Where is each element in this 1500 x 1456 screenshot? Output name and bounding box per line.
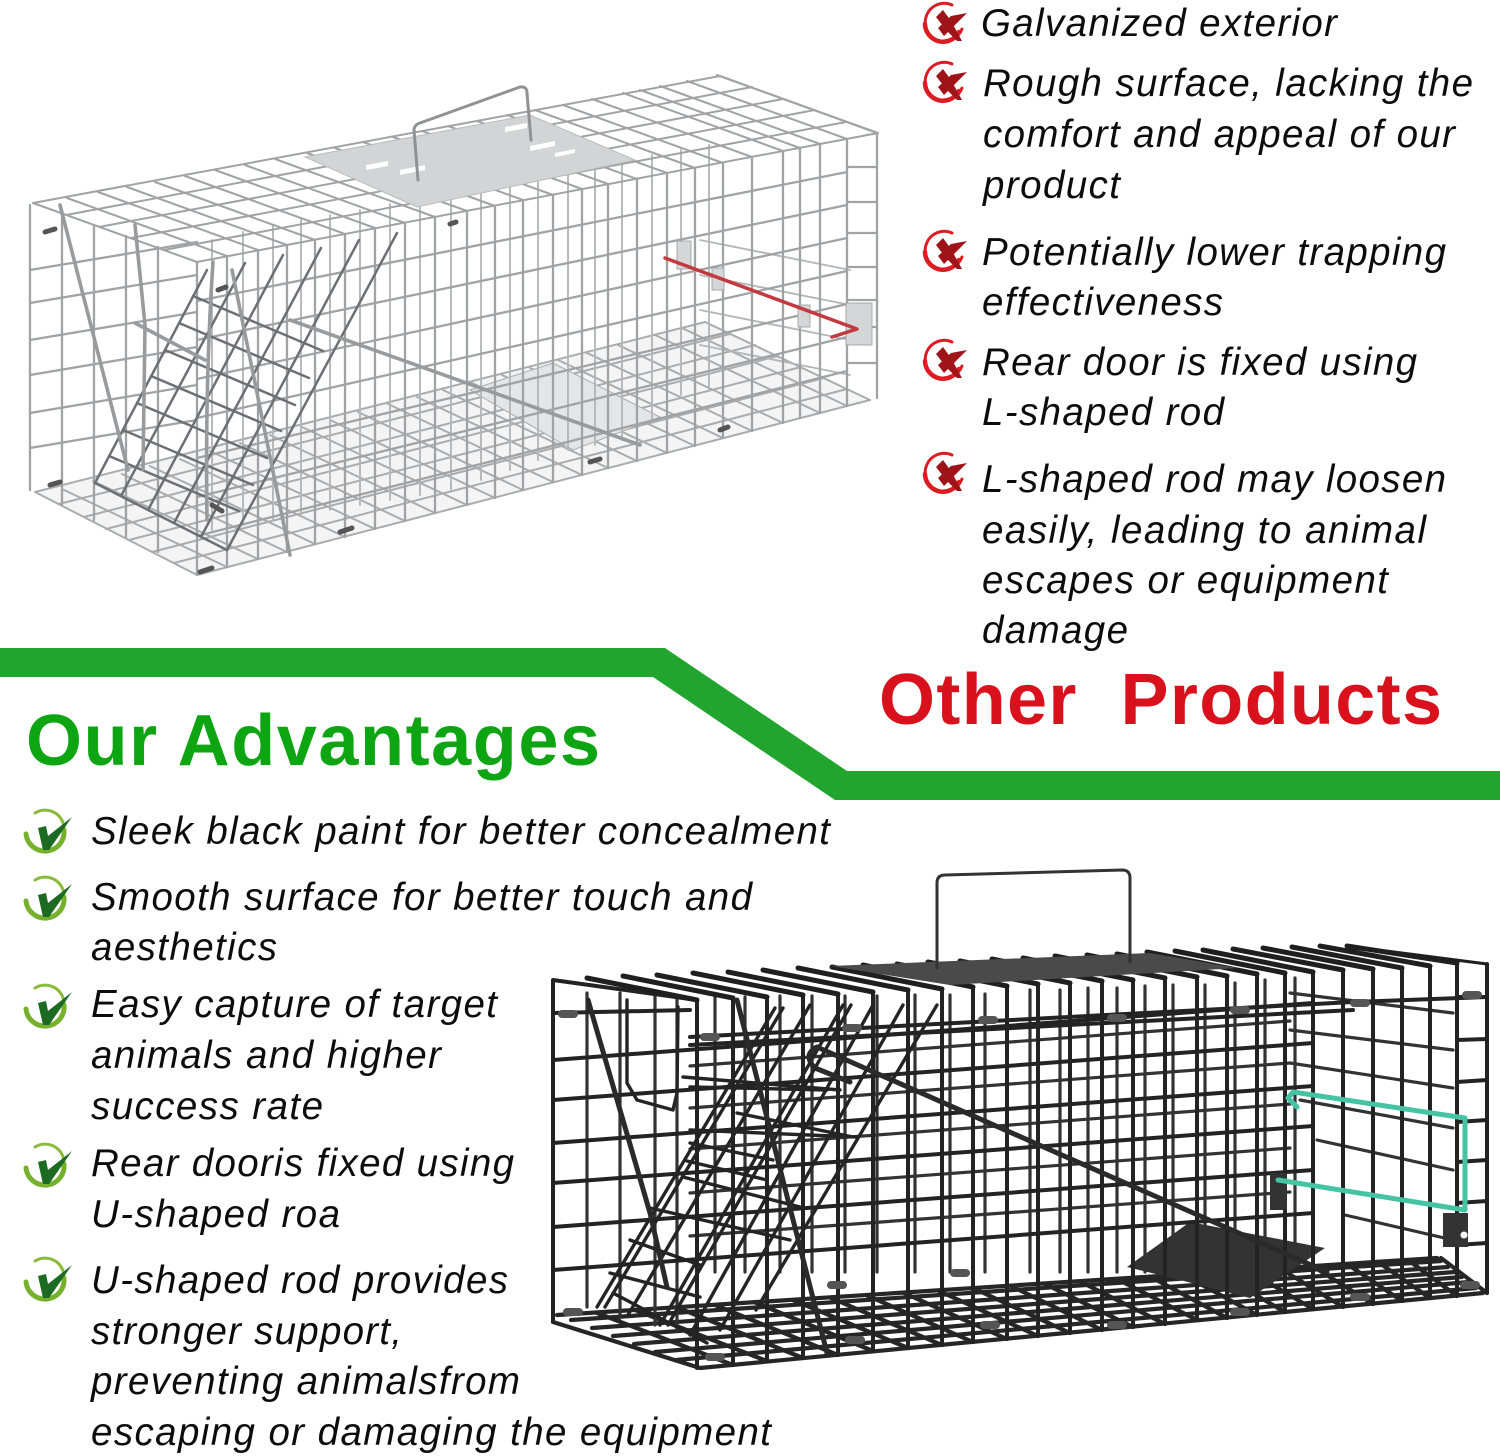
text: rear door L-shaped rod: Rear door is fixed using (982, 341, 1418, 384)
text: easy capture (91, 983, 499, 1128)
black trap top plate (830, 953, 1238, 985)
text: easy capture: animals and higher (91, 1034, 443, 1077)
text: rough surface: product (982, 164, 1122, 207)
black trap door braces and trigger rod (588, 1000, 1327, 1353)
black trap teal U-shaped rod (1278, 1092, 1465, 1210)
black trap slanted door (597, 1000, 937, 1343)
text: galvanized exterior: Galvanized exterior (981, 2, 1339, 45)
silver trap rear brackets (677, 241, 872, 345)
black trap side and end panels (553, 964, 1487, 1368)
icon: red cross (925, 231, 967, 270)
list: our advantages (26, 810, 832, 1454)
text: L-shaped rod loosens: easily, leading to animal (982, 509, 1427, 552)
illustration: silver galvanized trap (30, 75, 878, 575)
text: U-shaped rod support (90, 1259, 773, 1454)
text: U-shaped rod support: stronger support, (91, 1310, 402, 1353)
icon: red cross (925, 453, 967, 492)
text: smooth surface (91, 876, 754, 969)
silver trap carry handle (414, 87, 531, 180)
text: rear door U-shaped rod: Rear dooris fixed using (91, 1142, 515, 1185)
icon: green check (26, 877, 72, 918)
silver trap far wall (212, 145, 850, 530)
silver trap floor mesh (35, 322, 870, 575)
text: L-shaped rod loosens (982, 458, 1446, 652)
black trap carry handle (937, 870, 1130, 968)
icon: green check (26, 1258, 72, 1299)
text: smooth surface: Smooth surface for better touch and (91, 876, 754, 919)
icon: green check (26, 810, 72, 851)
text: rough surface: Rough surface, lacking the (983, 62, 1473, 105)
black trap treadle plate (1127, 1222, 1325, 1298)
green divider band (0, 648, 1500, 800)
silver trap top plate (305, 115, 635, 207)
icon: green check (26, 1144, 72, 1185)
text: rear door U-shaped rod: U-shaped roa (91, 1193, 340, 1236)
icon: red cross (925, 62, 967, 101)
text: sleek black paint: Sleek black paint for better concealment (91, 810, 832, 853)
text: rear door L-shaped rod (982, 341, 1418, 434)
text: lower trapping effectiveness: effectiveness (982, 281, 1223, 324)
list: other product drawbacks (925, 2, 1473, 652)
heading: Our Advantages: Our Advantages (26, 701, 600, 781)
text: U-shaped rod support: escaping or damaging the equipment (91, 1411, 773, 1454)
text: lower trapping effectiveness (982, 231, 1447, 324)
black trap clips (562, 995, 1478, 1357)
silver trap red L-shaped rod (665, 258, 857, 337)
text: U-shaped rod support: U-shaped rod provides (91, 1259, 508, 1302)
black trap floor mesh (553, 1258, 1487, 1368)
text: lower trapping effectiveness: Potentially lower trapping (982, 231, 1447, 274)
text: smooth surface: aesthetics (91, 926, 277, 969)
black trap top rods (587, 946, 1487, 1000)
text: easy capture: success rate (91, 1085, 323, 1128)
text: L-shaped rod loosens: damage (982, 609, 1128, 652)
silver trap floor tint (35, 322, 870, 575)
text: rear door U-shaped rod (91, 1142, 515, 1236)
icon: red cross (925, 3, 967, 42)
illustration: black painted trap (553, 870, 1487, 1368)
silver trap door braces and trigger rod (60, 205, 640, 555)
text: easy capture: Easy capture of target (91, 983, 499, 1026)
text: rough surface: comfort and appeal of our (983, 113, 1457, 156)
silver trap top mesh (33, 75, 878, 262)
silver trap clips (45, 222, 728, 572)
text: L-shaped rod loosens: escapes or equipment (982, 559, 1390, 602)
silver trap treadle plate (470, 363, 660, 450)
silver trap slanted door (95, 233, 397, 550)
heading: Other Products: Other Products (879, 660, 1442, 740)
icon: red cross (925, 340, 967, 379)
text: L-shaped rod loosens: L-shaped rod may loosen (982, 458, 1446, 501)
text: rough surface (982, 62, 1473, 207)
icon: green check (26, 985, 72, 1026)
silver trap side and end panels (30, 133, 877, 575)
text: rear door L-shaped rod: L-shaped rod (982, 391, 1226, 434)
black trap rear brackets (1270, 1173, 1468, 1247)
black trap far wall (587, 978, 1453, 1330)
text: U-shaped rod support: preventing animalsfrom (90, 1360, 520, 1403)
